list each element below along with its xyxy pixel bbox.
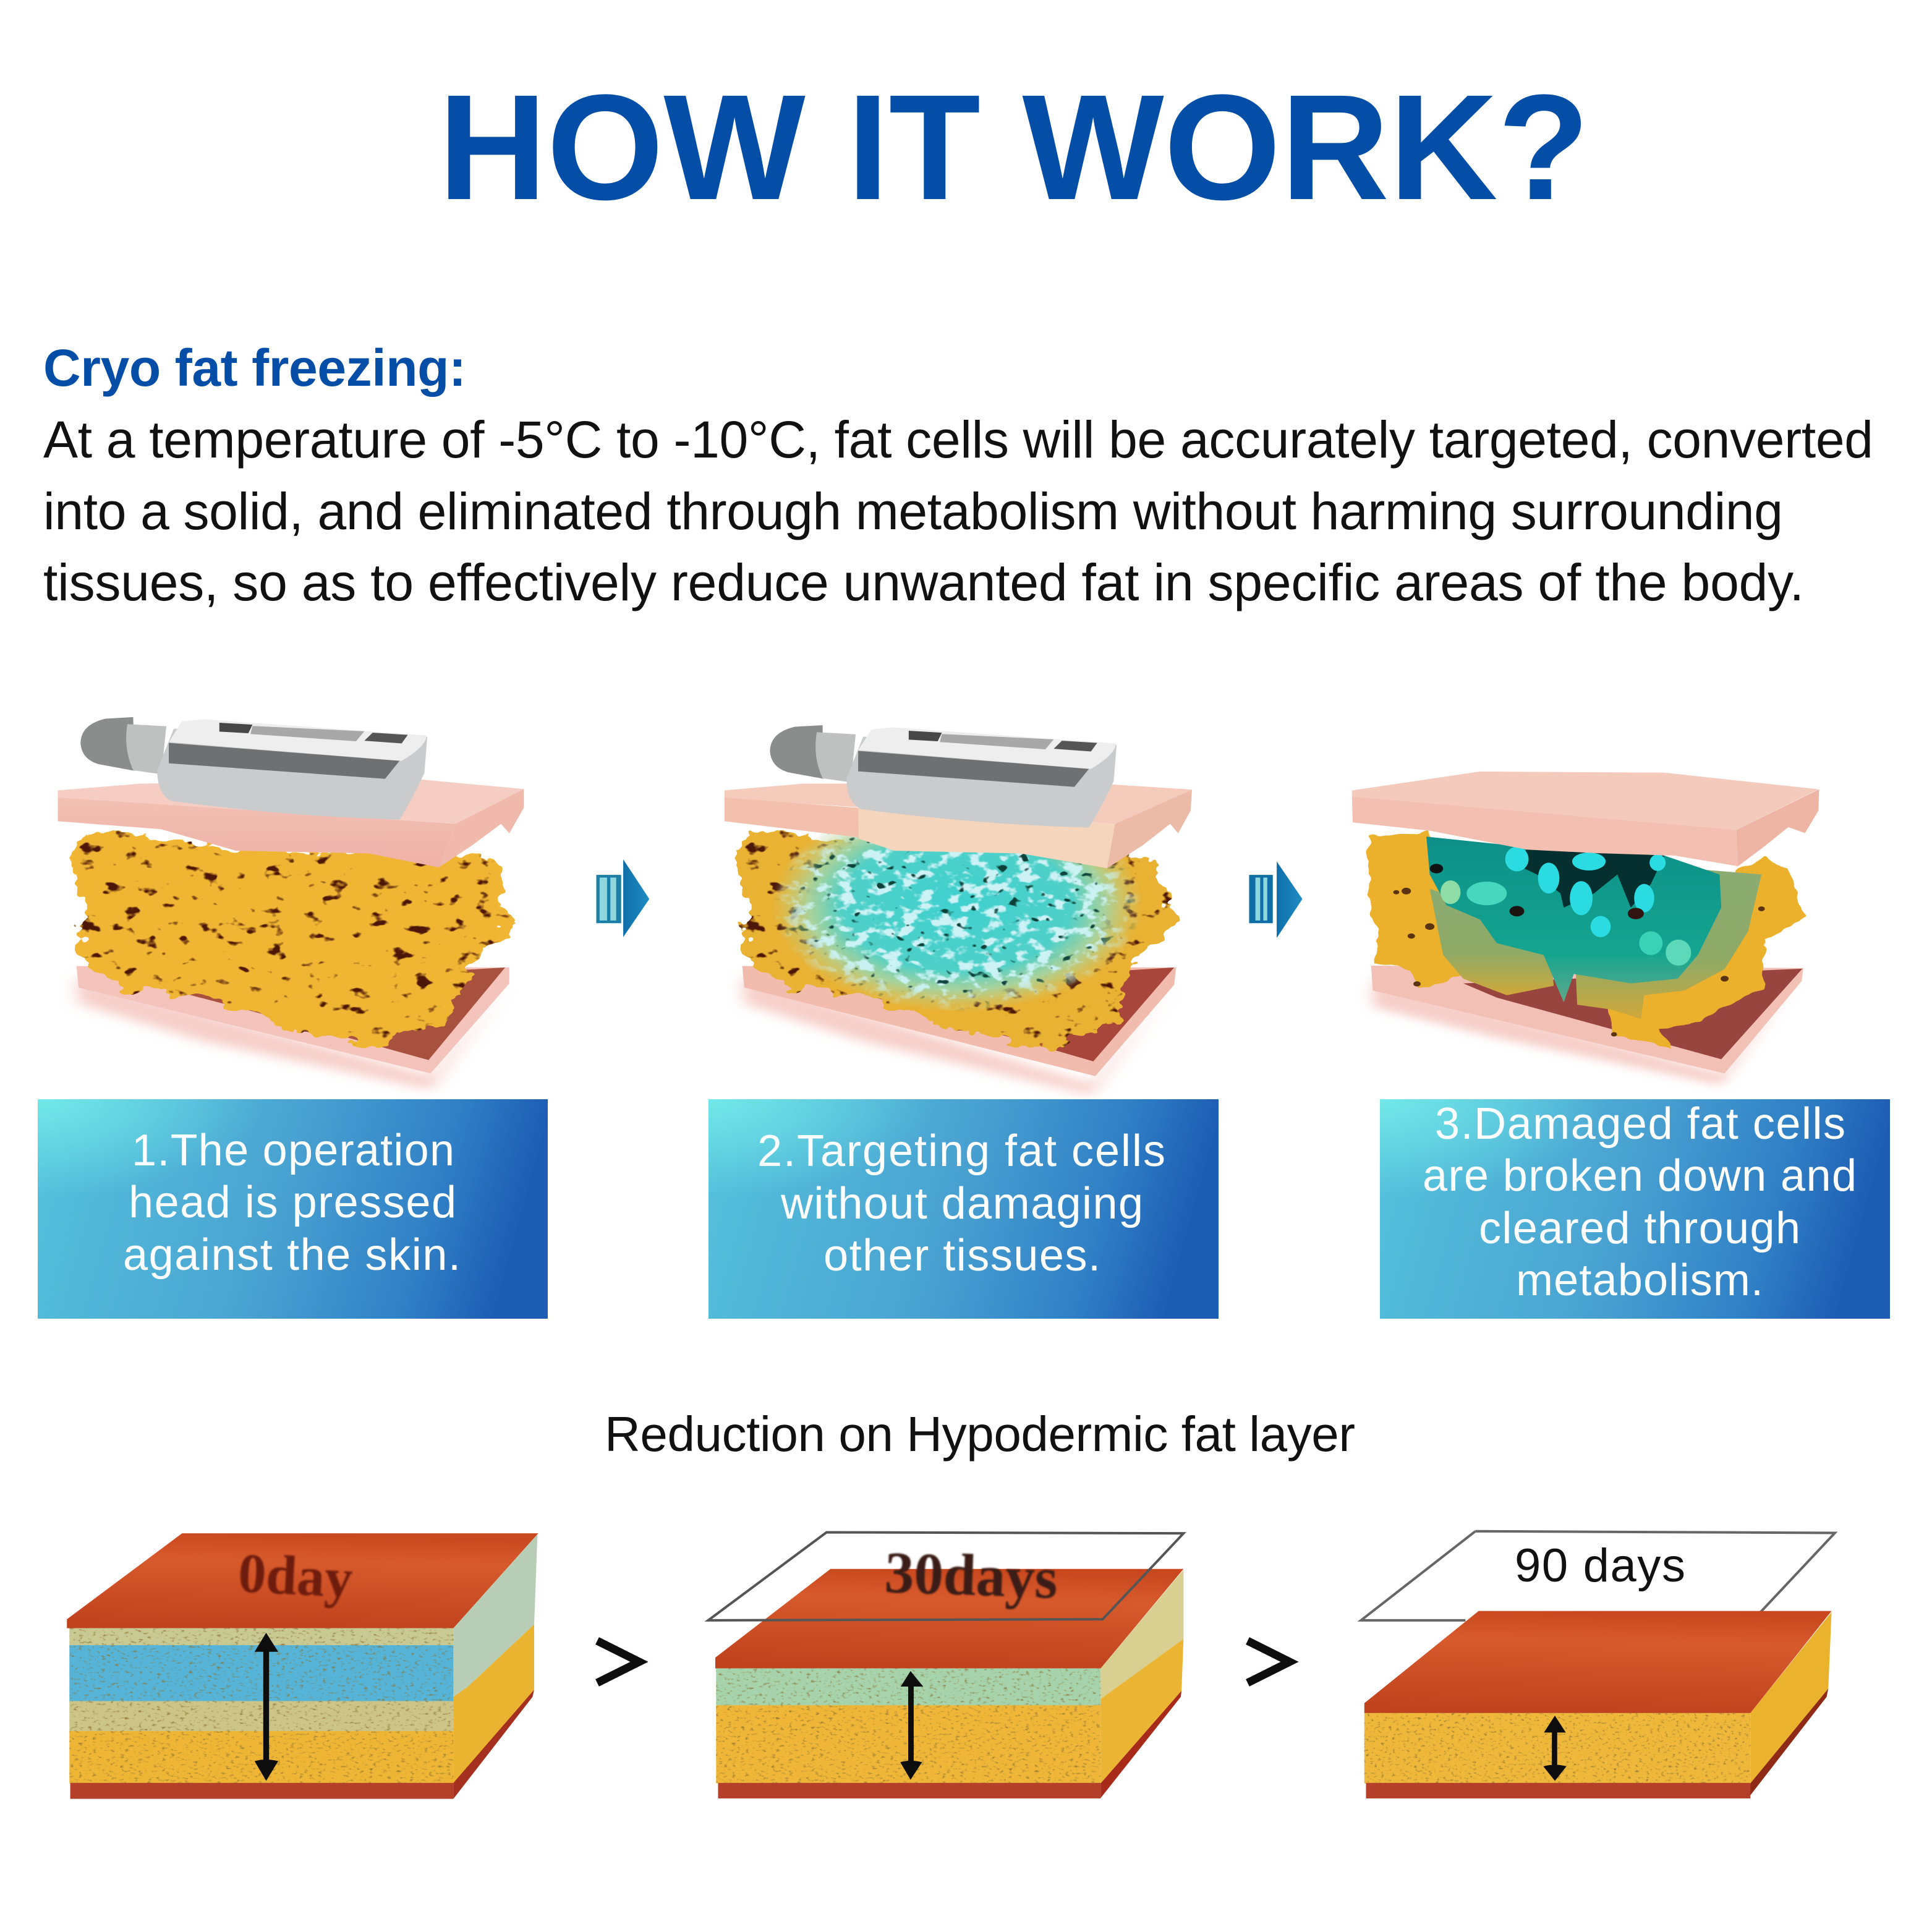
right side (1100, 1570, 1183, 1699)
comparison chevron 2 (1248, 1641, 1290, 1683)
caption box 2: other tissues. (823, 1231, 1100, 1280)
intro paragraph: At a temperature of -5°C to -10°C, fat cells will be accurately targeted, converted (43, 411, 1873, 469)
skin top (715, 1569, 1183, 1669)
yellow layer (1364, 1713, 1750, 1784)
skin top (67, 1533, 538, 1628)
caption box 2: without damaging (780, 1179, 1143, 1228)
dark spots (1510, 906, 1524, 916)
skin top (1364, 1611, 1832, 1713)
block: 90 days (1361, 1531, 1835, 1798)
right side (1750, 1612, 1832, 1783)
lower skin layer (743, 966, 1176, 1076)
skin bottom (70, 1783, 453, 1799)
right side (453, 1534, 537, 1697)
upper skin layer (1352, 772, 1818, 830)
base shadow (743, 977, 1174, 1095)
frozen zone (772, 797, 1143, 1011)
fat layer (740, 831, 1176, 1049)
intro paragraph: into a solid, and eliminated through metabolism without harming surrounding (43, 482, 1783, 540)
intro paragraph: tissues, so as to effectively reduce unwanted fat in specific areas of the body. (43, 553, 1804, 611)
caption box 3: 3.Damaged fat cells (1435, 1099, 1845, 1149)
thickness arrow (255, 1633, 278, 1781)
layers (716, 1669, 1100, 1783)
lower olive zones (1430, 888, 1554, 995)
arrow 2 (1249, 861, 1303, 938)
label: 90 days: 90 days (1515, 1539, 1685, 1592)
caption box 1: 1.The operation (132, 1126, 454, 1175)
caption box 2 (709, 1099, 1219, 1319)
arrow 1 (596, 859, 649, 937)
layers (69, 1628, 453, 1783)
base shadow (77, 977, 507, 1089)
cyan cells (1440, 847, 1691, 966)
intro paragraph (43, 411, 1873, 611)
step 3 illustration: damaged fat cells (1352, 772, 1819, 1085)
intro text block (43, 339, 1873, 611)
base shadow (1372, 974, 1802, 1085)
label: 0day: 0day (237, 1543, 354, 1610)
label: 30days: 30days (883, 1539, 1059, 1611)
thickness arrow (900, 1671, 923, 1780)
previous level outline (709, 1532, 1183, 1620)
caption box 3: metabolism. (1516, 1256, 1763, 1305)
intro heading: Cryo fat freezing: (43, 339, 466, 397)
thickness arrow (1543, 1716, 1567, 1781)
fat layer left (1368, 832, 1480, 988)
comparison chevron 1 (597, 1641, 639, 1683)
upper skin layer (725, 784, 1192, 824)
fat layer right (1607, 858, 1805, 1050)
block: 0 day (67, 1533, 538, 1799)
lower skin layer (1371, 966, 1803, 1073)
previous level outline (1361, 1531, 1835, 1620)
block: 30 days (709, 1532, 1183, 1798)
skin bottom (718, 1783, 1100, 1798)
section heading: reduction: Reduction on Hypodermic fat layer (605, 1406, 1355, 1462)
device (770, 725, 1117, 828)
fat layer (77, 831, 511, 1047)
dark gaps (1517, 848, 1664, 908)
title: HOW IT WORK? (438, 64, 1589, 231)
lower skin layer (77, 966, 509, 1073)
teal zone (1426, 836, 1721, 1002)
upper skin layer (58, 780, 524, 824)
caption box 3: cleared through (1479, 1204, 1800, 1253)
skin bottom (1366, 1783, 1750, 1798)
caption box 3: are broken down and (1423, 1151, 1857, 1201)
caption box 1 (38, 1099, 548, 1319)
step 2 illustration: cooling targeted fat (725, 725, 1192, 1095)
caption box 1: head is pressed (129, 1178, 456, 1227)
caption box 2: 2.Targeting fat cells (757, 1126, 1165, 1176)
caption box 1: against the skin. (123, 1230, 461, 1280)
device (80, 717, 427, 820)
caption box 3 (1380, 1099, 1890, 1319)
step 1 illustration: device on skin with fat layer (58, 717, 524, 1089)
